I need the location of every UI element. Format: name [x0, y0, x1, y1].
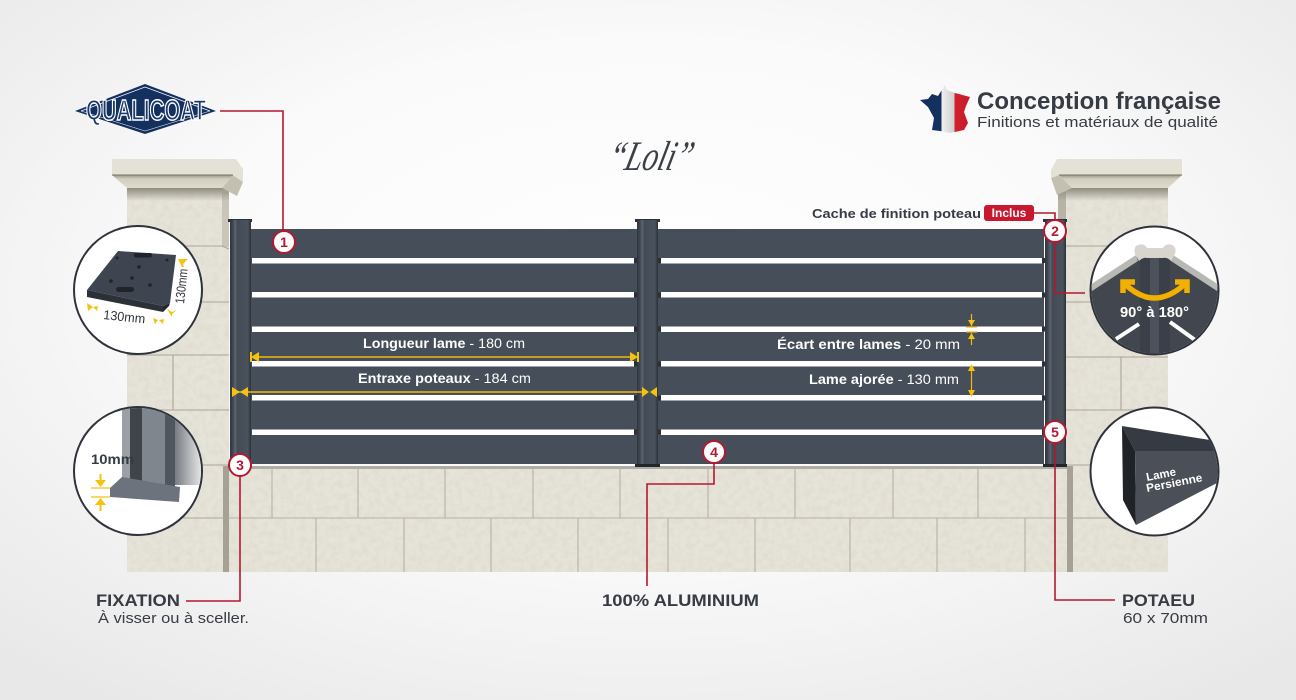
marker 2 [1044, 220, 1066, 242]
callout: base plate: 130mm [103, 307, 146, 326]
heading: Conception française: Finitions et matériaux de qualité [977, 114, 1218, 131]
leader lines [186, 111, 1115, 601]
right pillar [1051, 159, 1182, 572]
heading: Conception française [977, 88, 1221, 131]
heading: Conception française: Conception française [977, 88, 1221, 115]
callout: louvre blade: Persienne [1145, 472, 1204, 495]
wall: stone base and pillars [112, 159, 1182, 572]
callout: base plate: 130mm [172, 268, 191, 304]
dimension: post spacing [232, 371, 657, 397]
dimension: gap between slats: Écart entre lames - 20 mm [777, 337, 960, 352]
low wall [229, 466, 1067, 572]
callout: louvre blade: Lame [1145, 466, 1177, 484]
post: left [228, 219, 252, 467]
marker 3 [229, 454, 251, 476]
label: post cover included: Cache de finition poteau [812, 206, 981, 221]
callout: base plate [74, 226, 202, 354]
callout: fixation [74, 400, 205, 535]
callout: adjustable angle: 90° à 180° [1120, 305, 1189, 321]
icon: France flag map [920, 85, 970, 133]
infographic [73, 0, 1220, 623]
dimension: slat height [809, 364, 975, 397]
marker 5: 5 [1051, 424, 1059, 440]
left pillar [112, 159, 243, 572]
fence: right panel [658, 229, 1045, 464]
label: fixation: À visser ou à sceller. [98, 610, 249, 627]
label: post cover included [812, 205, 1034, 221]
callout: fixation: 10mm [91, 452, 134, 467]
marker 1 [273, 231, 295, 253]
dimension: slat length: Longueur lame - 180 cm [363, 336, 525, 351]
dimension: post spacing: Entraxe poteaux - 184 cm [358, 371, 531, 386]
post: centre [635, 219, 660, 467]
fence: left panel [251, 229, 637, 464]
dimension: slat height: Lame ajorée - 130 mm [809, 372, 959, 387]
post: right [1043, 219, 1067, 467]
label: fixation: FIXATION [96, 591, 180, 610]
marker 2: 2 [1051, 223, 1059, 239]
label: post [1122, 591, 1208, 627]
logo: Qualicoat: QUALICOAT [86, 95, 206, 127]
label: fixation [96, 591, 249, 627]
callout: adjustable angle [1090, 226, 1219, 360]
label: post cover included: Inclus [992, 206, 1027, 220]
logo: Qualicoat [75, 84, 216, 134]
title: Loli: “Loli” [604, 134, 699, 180]
marker 4 [703, 441, 725, 463]
label: post: 60 x 70mm [1123, 610, 1208, 627]
marker 4: 4 [710, 444, 718, 460]
callout: louvre blade [1090, 408, 1219, 536]
label: post: POTAEU [1122, 591, 1195, 610]
marker 1: 1 [280, 234, 288, 250]
marker 5 [1044, 421, 1066, 443]
dimension: slat length [250, 336, 639, 362]
marker 3: 3 [236, 457, 244, 473]
dimension: gap between slats [777, 314, 977, 352]
label: aluminium: 100% ALUMINIUM [602, 591, 759, 610]
